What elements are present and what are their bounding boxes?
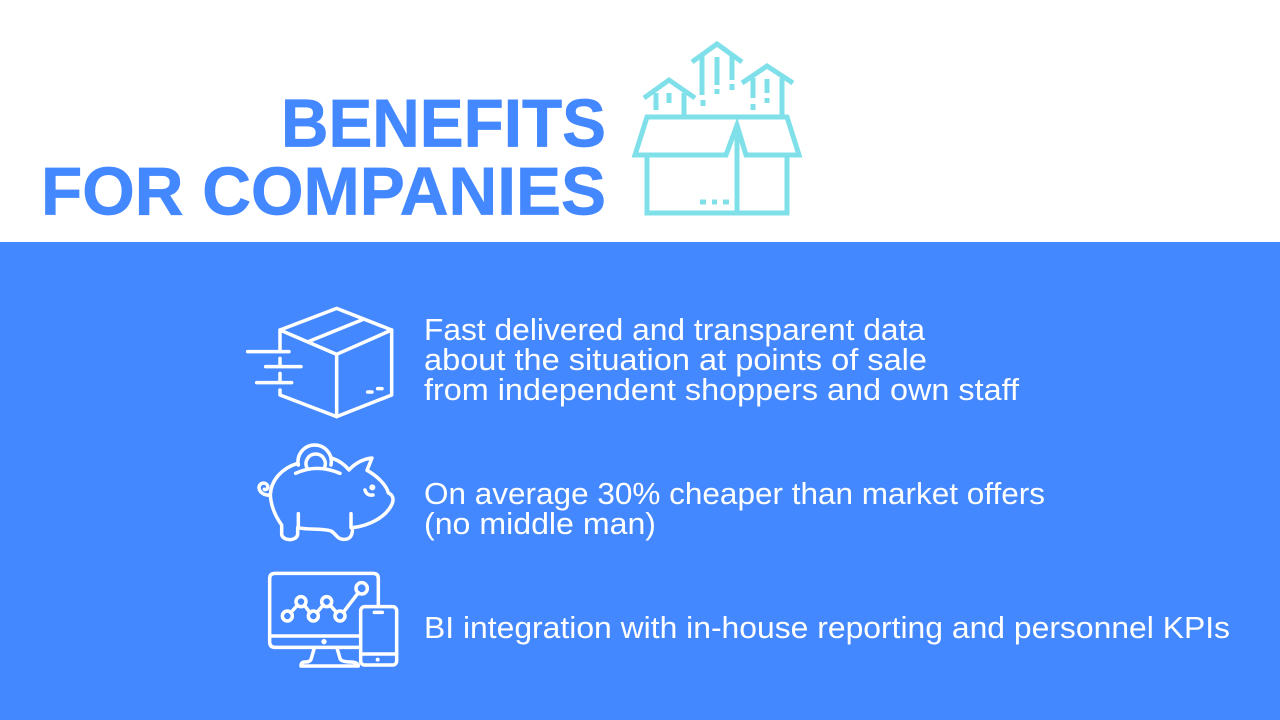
text: BI integration: BI integration with in-house reporting and personnel KPIs [424, 610, 1230, 645]
text: fast delivered data: about the situation at points of sale [424, 342, 927, 377]
text: fast delivered data [424, 312, 1019, 407]
text: cheaper offers: On average 30% cheaper than market offers [424, 476, 1045, 511]
blue benefits panel [0, 242, 1280, 720]
icon: open box with houses [635, 44, 799, 213]
title [41, 86, 606, 230]
header panel [0, 0, 1280, 242]
icon: monitor and phone with chart [270, 573, 397, 666]
icon: delivery box [248, 308, 392, 417]
text: fast delivered data: from independent shoppers and own staff [424, 372, 1019, 407]
text: fast delivered data: Fast delivered and transparent data [424, 312, 926, 347]
text: cheaper offers: (no middle man) [424, 506, 656, 541]
icon: piggy bank [259, 445, 393, 540]
title: FOR COMPANIES [41, 154, 606, 230]
title: BENEFITS [281, 86, 606, 162]
text: cheaper offers [424, 476, 1045, 541]
